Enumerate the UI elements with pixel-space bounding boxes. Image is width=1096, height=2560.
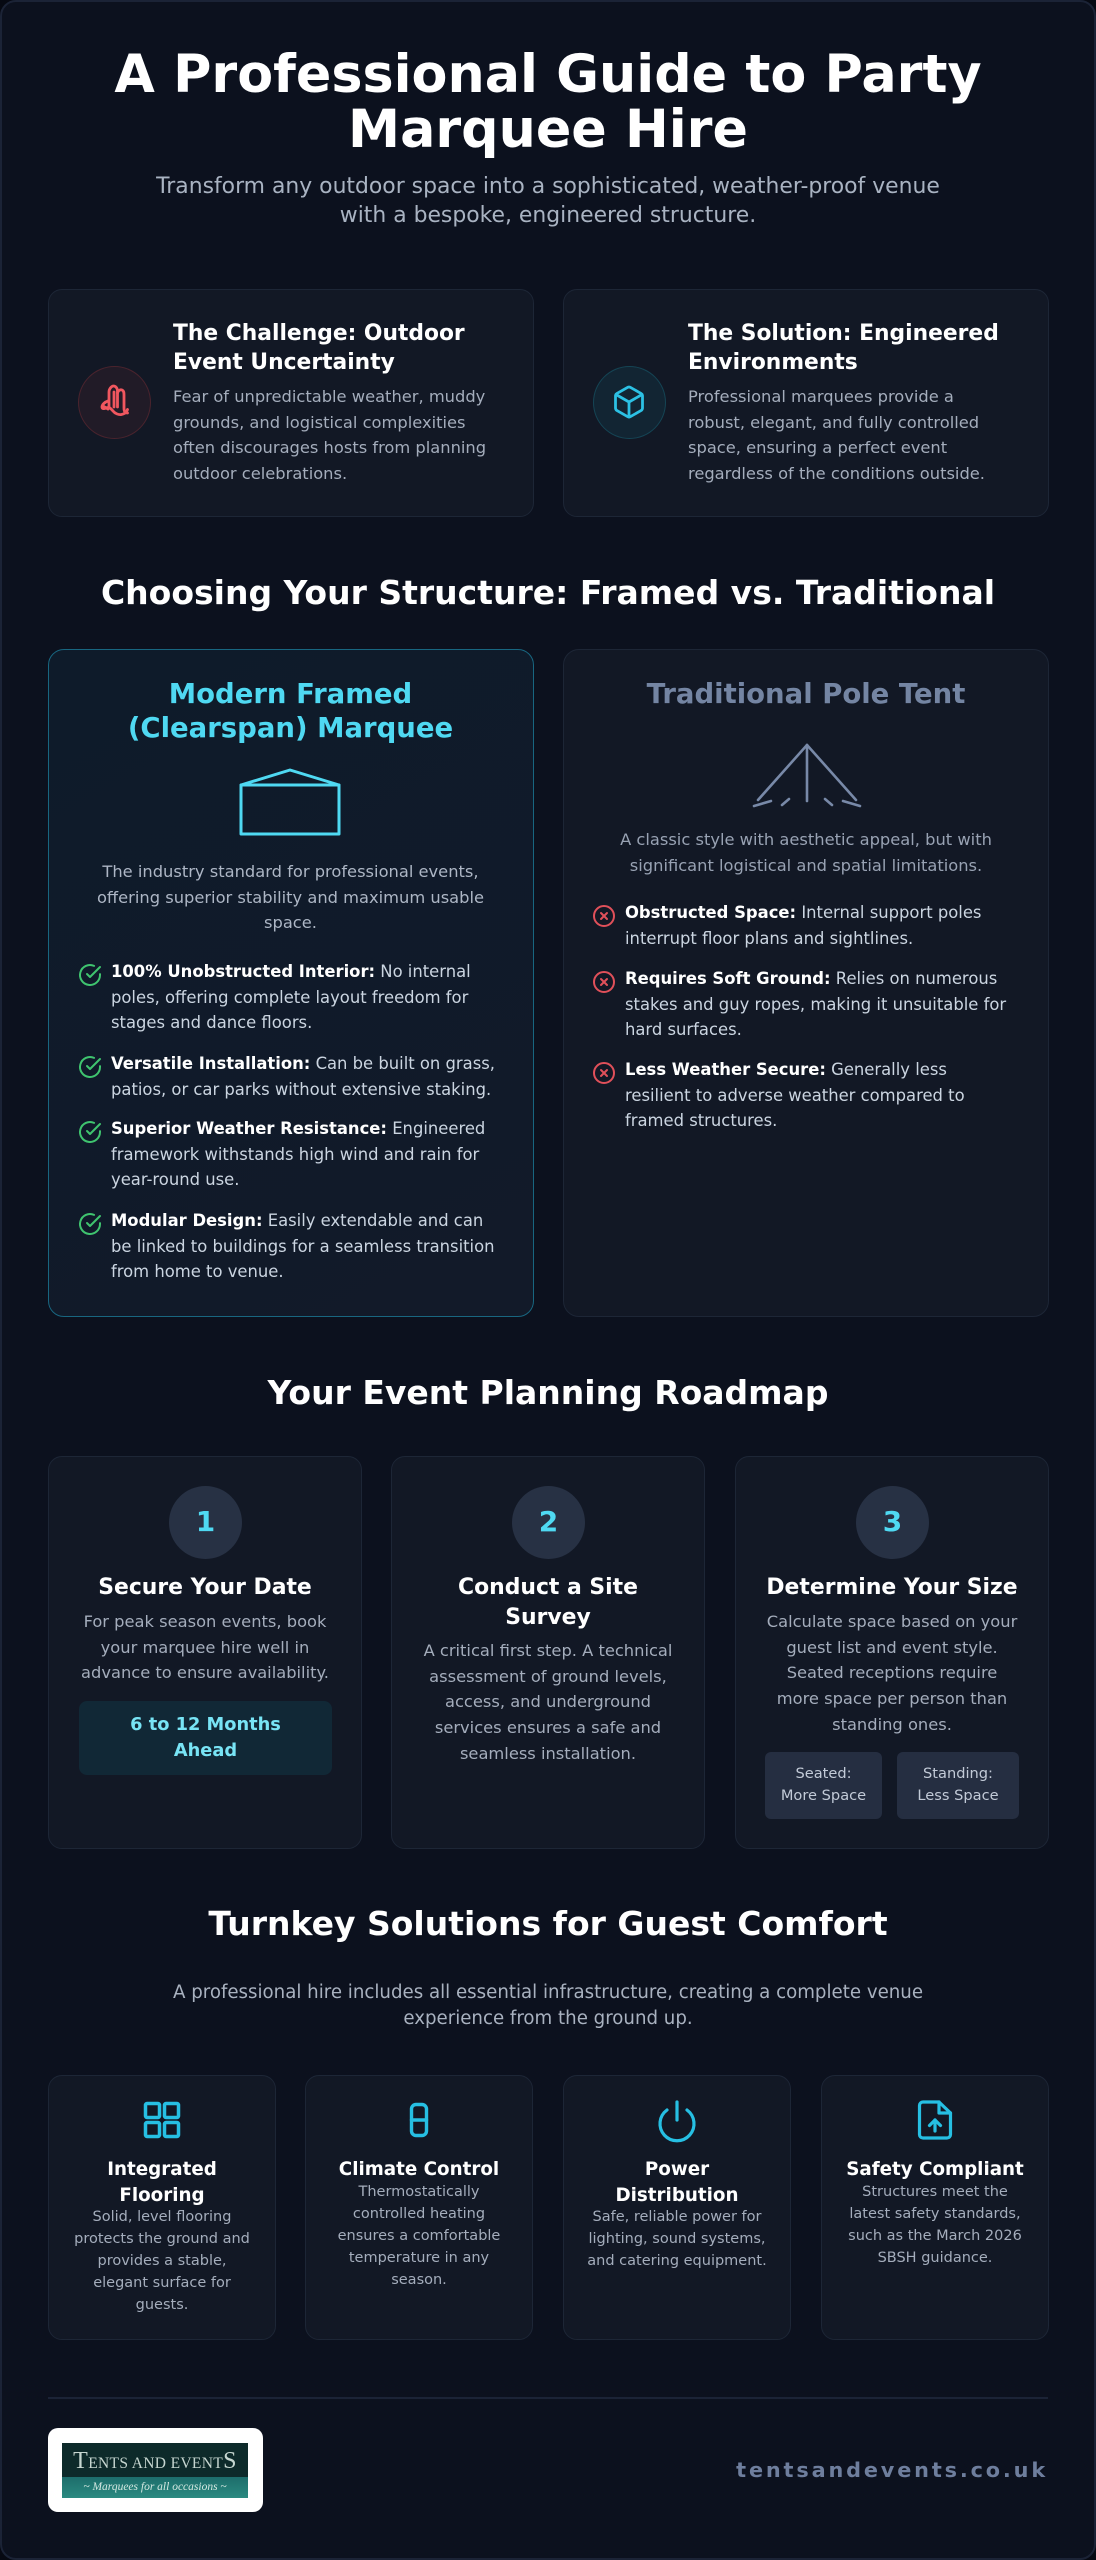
- drawback 1: interrupt floor plans and sightlines.: [625, 929, 913, 948]
- text: the challenge: outdoor celebrations.: [173, 464, 347, 483]
- heading: the challenge: Event Uncertainty: [173, 350, 395, 375]
- benefit 4: be linked to buildings for a seamless transition: [111, 1237, 495, 1256]
- panel: safety compliant: [821, 2075, 1049, 2340]
- benefit 1: [79, 962, 471, 1032]
- panel: integrated flooring: [48, 2075, 276, 2340]
- heading: choosing your structure: Choosing Your Structure: Framed vs. Traditional: [101, 573, 995, 612]
- icon: cube: [593, 366, 666, 439]
- text: power: [587, 2209, 767, 2269]
- text: the solution: space, ensuring a perfect event: [688, 438, 947, 457]
- heading: step 2: Conduct a Site: [458, 1575, 638, 1600]
- text: pole tent description: significant logistical and spatial limitations.: [630, 856, 982, 875]
- heading: framed: (Clearspan) Marquee: [128, 712, 453, 744]
- icon: power: [658, 2100, 696, 2142]
- icon: pole tent: [752, 744, 862, 808]
- text: turnkey intro: experience from the ground up.: [403, 2008, 693, 2029]
- callout: lead time: [79, 1701, 332, 1775]
- text: the challenge: [173, 387, 486, 483]
- text: the solution: regardless of the conditions outside.: [688, 464, 985, 483]
- benefit 3: year-round use.: [111, 1170, 239, 1189]
- heading: roadmap: Your Event Planning Roadmap: [268, 1373, 828, 1412]
- panel: power distribution: [563, 2075, 791, 2340]
- heading: step 3: Determine Your Size: [766, 1575, 1018, 1600]
- text: pole tent description: [620, 830, 992, 875]
- text: pole tent description: A classic style with aesthetic appeal, but with: [620, 830, 992, 849]
- heading: framed: Modern Framed: [169, 678, 412, 710]
- logo strapline: [62, 2477, 248, 2498]
- text: step 3: standing ones.: [832, 1715, 952, 1734]
- text: the challenge: grounds, and logistical complexities: [173, 413, 466, 432]
- icon: grid: [144, 2102, 180, 2138]
- heading: power: [615, 2159, 739, 2206]
- benefit 4: from home to venue.: [111, 1262, 284, 1281]
- text: safety: such as the March 2026: [848, 2228, 1022, 2244]
- text: the solution: robust, elegant, and fully controlled: [688, 413, 979, 432]
- text: power: lighting, sound systems,: [588, 2231, 765, 2247]
- panel: step 2: [391, 1456, 705, 1849]
- text: step 2: [424, 1641, 672, 1763]
- text: the challenge: often discourages hosts from planning: [173, 438, 486, 457]
- icon: file upload: [918, 2100, 952, 2140]
- text: step 1: [81, 1612, 329, 1682]
- heading: turnkey solutions: Turnkey Solutions for Guest Comfort: [208, 1904, 888, 1943]
- text: step 2: services ensures a safe and: [435, 1718, 661, 1737]
- drawback 3: Less Weather Secure: Generally less: [625, 1060, 947, 1079]
- panel: traditional pole tent: [563, 649, 1049, 1317]
- text: framed description: The industry standard for professional events,: [102, 862, 479, 881]
- text: flooring: elegant surface for: [93, 2275, 231, 2291]
- benefit 2: [79, 1054, 495, 1099]
- text: climate: season.: [391, 2272, 447, 2288]
- text: step 1: advance to ensure availability.: [81, 1663, 329, 1682]
- benefit 1: poles, offering complete layout freedom for: [111, 988, 468, 1007]
- text: step 2: assessment of ground levels,: [429, 1667, 667, 1686]
- icon: heater: [410, 2102, 428, 2138]
- icon: framed marquee: [240, 768, 340, 836]
- panel: the challenge: [48, 289, 534, 517]
- text: safety: latest safety standards,: [849, 2206, 1021, 2222]
- heading: the solution: The Solution: Engineered: [688, 321, 999, 346]
- text: step 1: For peak season events, book: [84, 1612, 326, 1631]
- benefit 3: Superior Weather Resistance: Engineered: [111, 1119, 485, 1138]
- chip: standing: [897, 1752, 1019, 1819]
- title: [114, 44, 982, 160]
- text: power: Safe, reliable power for: [593, 2209, 761, 2225]
- text: the solution: Professional marquees provide a: [688, 387, 954, 406]
- title: A Professional Guide to Party: [114, 44, 982, 105]
- logo banner: [62, 2443, 248, 2498]
- text: safety: SBSH guidance.: [878, 2250, 992, 2266]
- chip: seated: Seated:: [795, 1765, 852, 1782]
- benefit 4: Modular Design: Easily extendable and can: [111, 1211, 483, 1230]
- text: flooring: Solid, level flooring: [93, 2209, 231, 2225]
- panel: climate control: [305, 2075, 533, 2340]
- callout: lead time: Ahead: [174, 1740, 237, 1761]
- drawback 1: [593, 903, 981, 948]
- drawback 3: resilient to adverse weather compared to: [625, 1086, 965, 1105]
- benefit 1: stages and dance floors.: [111, 1013, 312, 1032]
- heading: flooring: [107, 2159, 217, 2206]
- benefit 2: patios, or car parks without extensive staking.: [111, 1080, 491, 1099]
- benefit 1: 100% Unobstructed Interior: No internal: [111, 962, 471, 981]
- heading: power: Distribution: [615, 2185, 739, 2206]
- chip: seated: More Space: [781, 1787, 866, 1804]
- text: step 2: access, and underground: [445, 1692, 651, 1711]
- callout: lead time: 6 to 12 Months: [130, 1714, 281, 1735]
- step number 1: [169, 1486, 242, 1559]
- text: safety: Structures meet the: [862, 2184, 1008, 2200]
- panel: the solution: [563, 289, 1049, 517]
- list: pole tent drawbacks: [593, 903, 1006, 1130]
- heading: flooring: Flooring: [119, 2185, 205, 2206]
- text: the challenge: Fear of unpredictable weather, muddy: [173, 387, 485, 406]
- panel: step 3: [735, 1456, 1049, 1849]
- step number 3: [856, 1486, 929, 1559]
- text: climate: ensures a comfortable: [338, 2228, 500, 2244]
- logo name: TENTS AND EVENTS: [73, 2448, 237, 2474]
- subtitle: with a bespoke, engineered structure.: [340, 203, 756, 228]
- heading: step 2: Survey: [505, 1605, 591, 1630]
- website url: tentsandevents.co.uk: [736, 2458, 1048, 2482]
- drawback 3: [593, 1060, 965, 1130]
- text: framed description: offering superior stability and maximum usable: [97, 888, 484, 907]
- text: turnkey intro: [173, 1982, 923, 2029]
- drawback 2: stakes and guy ropes, making it unsuitable for: [625, 995, 1006, 1014]
- text: the solution: [688, 387, 985, 483]
- benefit 4: [79, 1211, 495, 1281]
- heading: step 2: [458, 1575, 638, 1630]
- text: flooring: protects the ground and: [74, 2231, 250, 2247]
- step number 2: 2: [539, 1505, 558, 1538]
- benefit 3: framework withstands high wind and rain for: [111, 1145, 479, 1164]
- heading: flooring: Integrated: [107, 2159, 217, 2180]
- heading: step 1: Secure Your Date: [98, 1575, 312, 1600]
- text: step 3: more space per person than: [777, 1689, 1007, 1708]
- logo strapline: ~ Marquees for all occasions ~: [83, 2481, 227, 2493]
- text: climate: controlled heating: [353, 2206, 485, 2222]
- icon: hand warning: [78, 366, 151, 439]
- text: climate: [338, 2184, 500, 2288]
- heading: the solution: Environments: [688, 350, 858, 375]
- heading: the challenge: The Challenge: Outdoor: [173, 321, 465, 346]
- heading: framed: [128, 678, 453, 744]
- drawback 2: Requires Soft Ground: Relies on numerous: [625, 969, 997, 988]
- text: step 3: guest list and event style.: [786, 1638, 998, 1657]
- step number 2: [512, 1486, 585, 1559]
- text: step 3: [767, 1612, 1018, 1734]
- text: step 2: A critical first step. A technical: [424, 1641, 672, 1660]
- heading: safety: Safety Compliant: [846, 2159, 1024, 2180]
- text: safety: [848, 2184, 1022, 2266]
- text: climate: temperature in any: [349, 2250, 489, 2266]
- heading: climate: Climate Control: [339, 2159, 499, 2180]
- text: step 3: Seated receptions require: [787, 1663, 997, 1682]
- text: step 1: your marquee hire well in: [101, 1638, 309, 1657]
- list: framed benefits: [79, 962, 495, 1281]
- heading: power: Power: [645, 2159, 709, 2180]
- benefit 3: [79, 1119, 485, 1189]
- subtitle: [156, 174, 940, 228]
- chip: seated: [765, 1752, 882, 1819]
- heading: pole tent: Traditional Pole Tent: [647, 678, 965, 710]
- drawback 2: [593, 969, 1006, 1039]
- text: framed description: [97, 862, 484, 932]
- text: step 3: Calculate space based on your: [767, 1612, 1017, 1631]
- drawback 3: framed structures.: [625, 1111, 777, 1130]
- text: flooring: [74, 2209, 250, 2313]
- step number 3: 3: [883, 1505, 902, 1538]
- heading: the solution: [688, 321, 999, 375]
- benefit 2: Versatile Installation: Can be built on grass,: [111, 1054, 495, 1073]
- text: power: and catering equipment.: [587, 2253, 767, 2269]
- drawback 2: hard surfaces.: [625, 1020, 742, 1039]
- panel: modern framed marquee: [48, 649, 534, 1317]
- chip: standing: Less Space: [917, 1787, 999, 1804]
- text: framed description: space.: [264, 913, 317, 932]
- title: Marquee Hire: [348, 99, 748, 160]
- step number 1: 1: [196, 1505, 215, 1538]
- subtitle: Transform any outdoor space into a sophisticated, weather-proof venue: [156, 174, 940, 199]
- text: step 2: seamless installation.: [460, 1744, 636, 1763]
- logo: tents and events: [48, 2428, 263, 2512]
- text: flooring: guests.: [136, 2297, 188, 2313]
- text: flooring: provides a stable,: [98, 2253, 226, 2269]
- drawback 1: Obstructed Space: Internal support poles: [625, 903, 981, 922]
- text: climate: Thermostatically: [358, 2184, 480, 2200]
- text: turnkey intro: A professional hire includes all essential infrastructure, creating a complete venue: [173, 1982, 923, 2003]
- panel: step 1: [48, 1456, 362, 1849]
- chip: standing: Standing:: [923, 1765, 993, 1782]
- heading: the challenge: [173, 321, 465, 375]
